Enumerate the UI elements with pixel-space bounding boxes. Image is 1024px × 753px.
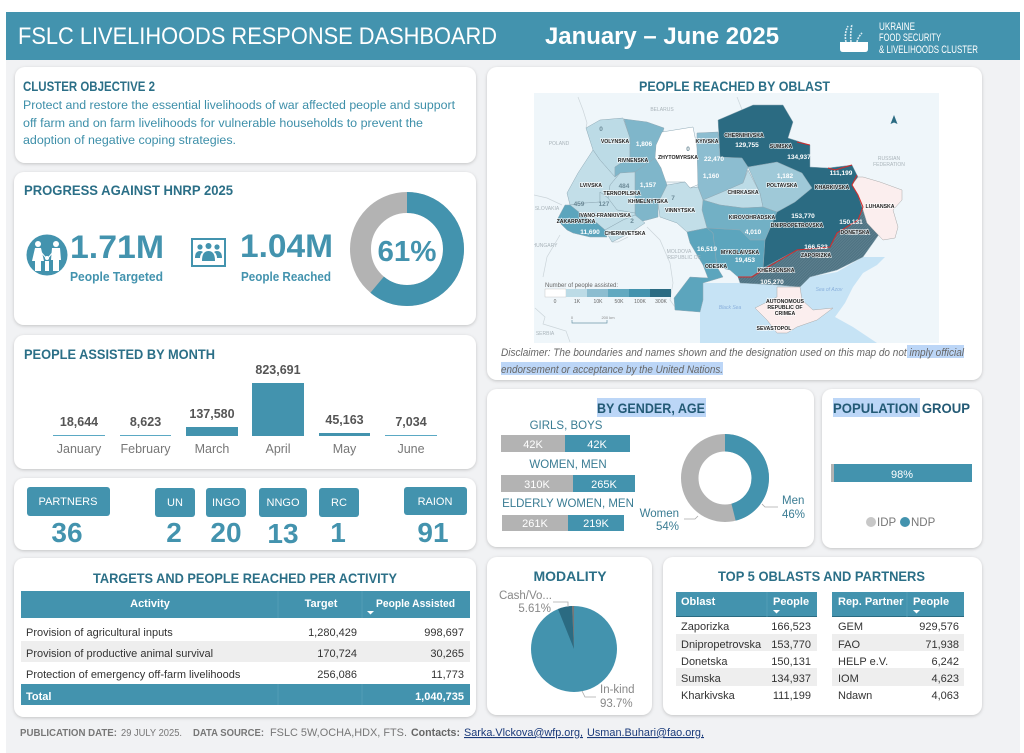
oblast labels: CHIRKASKA [727,190,759,196]
donut chart: women, men: Women [640,508,679,520]
bar chart: monthly: April [265,442,291,456]
stacked bars: age groups: 42K [523,439,543,451]
panel: top 5 oblasts and partners [663,557,982,715]
country labels: REPUBLIC OF [667,255,701,261]
stat: people reached: 1.04M [240,228,333,264]
table: oblasts: 153,770 [771,639,811,651]
pie chart: 93.7% [600,698,633,710]
bar chart: monthly [53,363,437,456]
panel: cluster objective [15,67,476,163]
heading: targets: TARGETS AND PEOPLE REACHED PER ACTIVITY [93,570,398,586]
table: partners: Ndawn [838,690,872,702]
map legend: 10K [594,299,603,305]
bar chart: monthly: 823,691 [255,363,301,377]
bar chart: monthly: January [57,442,102,456]
table: partners: FAO [838,639,860,651]
table: partners: GEM [838,621,863,633]
map legend: 0 [554,299,557,305]
partner labels: PARTNERS [39,496,97,508]
footer: Sarka.Vlckova@wfp.org, [464,727,583,739]
partner labels: UN [167,497,183,509]
oblast values [574,126,863,286]
oblast labels: CHERNIHIVSKA [724,133,764,139]
icon: family [26,234,68,276]
bar chart: monthly: May [333,442,357,456]
oblast values: 22,470 [704,156,724,163]
neighbour borders [534,97,743,342]
disclaimer: Disclaimer: The boundaries and names shown and the designation used on this map do not imply official [501,347,964,359]
panel: partners [14,478,476,550]
oblast labels: KYIVSKA [695,139,719,145]
table: partners: People [913,596,949,608]
table: activities: 1,040,735 [415,691,464,703]
country labels: SERBIA [536,331,555,337]
bar chart: monthly: March [195,442,229,456]
stat: people reached: People Reached [241,270,331,284]
table: activities: People Assisted [376,598,455,610]
header banner [6,12,1020,60]
stacked bars: age groups: ELDERLY WOMEN, MEN [502,498,634,510]
partner counts: 1 [330,517,346,548]
oblast values: 11,690 [580,229,600,236]
table: partners: HELP e.V. [838,656,888,668]
scale bar: 200 km [601,315,615,320]
stat: people targeted [70,229,164,284]
country labels: Black Sea [719,305,741,311]
table: oblasts: Zaporizka [681,621,730,633]
oblast values: 1,182 [777,173,794,180]
panel: people reached by oblast [487,67,982,380]
pie chart [499,590,635,710]
partner labels [39,496,452,509]
oblast labels: ZHYTOMYRSKA [658,155,698,161]
table: oblasts: Oblast [681,596,716,608]
table: activities: Protection of emergency off-farm livelihoods [26,669,241,681]
oblast labels: LUHANSKA [865,204,895,210]
table: oblasts: 150,131 [771,656,811,668]
table: oblasts: Dnipropetrovska [681,639,762,651]
partner counts: 20 [210,517,242,548]
table: oblasts: Kharkivska [681,690,736,702]
oblast labels: DNIPROPETROVSKA [771,223,823,229]
oblast values: 7 [671,195,675,202]
donut chart: women, men: Men [782,495,804,507]
stacked bars: age groups: 310K [524,479,551,491]
logo text: & LIVELIHOODS CLUSTER [879,44,978,56]
heading: map: PEOPLE REACHED BY OBLAST [639,78,830,94]
panel: targets per activity [14,558,476,717]
objective text: adoption of negative coping strategies. [23,133,236,147]
oblast labels: POLTAVSKA [767,183,798,189]
bar chart: monthly: 45,163 [325,413,364,427]
table: activities: Target [305,598,338,610]
logo text [879,21,978,56]
pie chart: 5.61% [518,603,551,615]
heading: cluster objective: CLUSTER OBJECTIVE 2 [23,78,155,94]
table: activities: 11,773 [431,669,464,681]
oblast values: 111,199 [830,170,853,177]
table: oblasts: 111,199 [773,690,811,702]
stacked bars: age groups: WOMEN, MEN [529,459,607,471]
oblast labels: REPUBLIC OF [767,305,803,311]
oblast values: 459 [574,201,585,208]
oblast labels: SEVASTOPOL [757,326,792,332]
oblast labels: KHERSONSKA [758,268,795,274]
map legend [545,283,671,305]
heading: progress: PROGRESS AGAINST HNRP 2025 [24,182,233,198]
oblast labels: CHERNIVETSKA [605,231,646,237]
panel: modality [487,557,652,715]
table: partners: 6,242 [931,656,959,668]
partner labels: RAION [418,496,452,508]
partner counts [51,517,449,549]
title: FSLC LIVELIHOODS RESPONSE DASHBOARD [18,23,497,50]
bar chart: monthly: 8,623 [130,415,161,429]
table: partners: 4,623 [931,673,959,685]
oblast labels: MYKOLAIVSKA [721,250,759,256]
panel: people assisted by month [14,335,476,469]
donut chart: women, men: 46% [782,509,805,521]
oblast values: 127 [599,201,610,208]
panel: population group [822,389,982,548]
stacked bars: age groups: 219K [583,518,610,530]
country labels: Sea of Azov [816,287,843,293]
table: partners [832,592,964,702]
pie chart: In-kind [600,684,635,696]
table: partners: Rep. Partner [838,596,904,608]
oblast labels: LVIVSKA [580,183,602,189]
oblast values: 484 [619,183,630,190]
oblast values: 134,937 [787,154,811,161]
oblast values: 0 [686,146,690,153]
footer [20,727,704,739]
panel: progress against HNRP [14,172,476,325]
partner labels: INGO [212,497,240,509]
logo: wheat bowl [840,24,868,52]
heading: gender: BY GENDER, AGE [597,400,705,416]
bar chart: monthly: 137,580 [189,407,235,421]
oblast labels: KHMELNYTSKA [628,199,668,205]
oblast labels: DONETSKA [840,230,870,236]
stacked bars: age groups: 261K [522,518,549,530]
logo text: FOOD SECURITY [879,32,941,44]
logo text: UKRAINE [879,21,915,33]
bar chart: monthly: June [397,442,425,456]
partner counts: 2 [166,517,182,548]
table: activities: Activity [130,598,171,610]
table: oblasts: 166,523 [771,621,811,633]
stat: people targeted: People Targeted [70,270,163,284]
oblast labels: CRIMEA [775,311,795,317]
stat: people targeted: 1.71M [70,229,164,265]
table: activities: 30,265 [430,648,464,660]
footer: DATA SOURCE: [193,728,264,739]
partner counts: 91 [417,517,449,548]
footer: Usman.Buhari@fao.org, [587,727,704,739]
table: activities: 1,280,429 [308,627,357,639]
oblast labels: KIROVOHRADSKA [729,215,775,221]
oblast labels: ZAKARPATSKA [557,219,596,225]
donut chart: 61% [360,202,454,296]
oblast labels: RIVNENSKA [618,158,649,164]
country labels: FEDERATION [873,162,905,168]
oblast labels [557,133,895,332]
table: partners: 71,938 [925,639,959,651]
stat: people reached [240,228,333,284]
oblast values: 0 [599,126,603,133]
bar chart: monthly: 7,034 [395,415,427,429]
oblast values: 105,270 [760,279,784,286]
heading: population: POPULATION GROUP [833,400,970,416]
icon: group of people [192,239,225,266]
table: oblasts: 134,937 [771,673,811,685]
oblast values: 166,523 [804,244,828,251]
oblast labels: VINNYTSKA [665,208,695,214]
country labels: BELARUS [650,107,674,113]
legend: IDP [877,517,896,529]
oblast values: 150,131 [839,219,863,226]
legend [866,517,936,529]
oblast labels: VOLYNSKA [601,139,629,145]
pie chart: Cash/Vo... [499,590,552,602]
oblast values: 19,453 [735,257,755,264]
table: partners: 929,576 [919,621,959,633]
objective text: Protect and restore the essential livelihoods of war affected people and support [23,98,456,112]
objective text: off farm and on farm livelihoods for vulnerable households to prevent the [23,116,423,130]
map legend: 300K [655,299,667,305]
partner counts: 36 [51,517,83,548]
footer: PUBLICATION DATE: [20,728,117,739]
country labels: RUSSIAN [878,156,900,162]
partner buttons [27,487,467,517]
country labels [533,107,905,337]
map legend: 1K [574,299,581,305]
bar: 98% NDP [831,464,972,482]
oblast values: 2 [630,218,634,225]
table: activities: 256,086 [317,669,357,681]
oblast labels: TERNOPILSKA [603,191,641,197]
map legend: Number of people assisted: [545,283,618,289]
table: partners: IOM [838,673,859,685]
table: oblasts [676,592,817,702]
table: activities [21,591,470,705]
partner labels: NNGO [266,497,300,509]
country labels: SLOVAKIA [535,206,560,212]
disclaimer: endorsement or acceptance by the United Nations. [501,364,723,376]
stacked bars: age groups [501,420,635,531]
table: activities: Provision of agricultural inputs [26,627,173,639]
oblast labels: SUMSKA [770,144,792,150]
heading: top 5: TOP 5 OBLASTS AND PARTNERS [718,568,925,584]
oblast values: 1,160 [703,173,720,180]
country labels: HUNGARY [533,243,558,249]
objective text [23,98,456,147]
oblast labels: AUTONOMOUS [766,299,805,305]
heading: by month: PEOPLE ASSISTED BY MONTH [24,346,215,362]
donut chart: women, men [640,443,805,533]
partner labels: RC [331,497,347,509]
bar chart: monthly: February [120,442,171,456]
oblast values: 129,755 [735,142,759,149]
table: partners: 4,063 [931,690,959,702]
oblasts [557,105,902,333]
donut chart: women, men: 54% [656,521,679,533]
table: activities: Provision of productive animal survival [26,648,213,660]
disclaimer [501,345,964,376]
oblast values: 1,806 [636,141,653,148]
oblast labels: KHARKIVSKA [815,185,850,191]
oblast values: 153,770 [791,213,815,220]
heading: modality: MODALITY [533,568,607,584]
partner counts: 13 [267,518,299,549]
date range: January – June 2025 [545,23,779,50]
stacked bars: age groups: GIRLS, BOYS [530,420,603,432]
stacked bars: age groups: 42K [587,439,607,451]
oblast labels: IVANO-FRANKIVSKA [579,213,631,219]
table: activities: 998,697 [424,627,464,639]
frontline [738,142,863,277]
country labels: MOLDOVA [667,249,692,255]
country labels: POLAND [549,141,570,147]
scale bar [571,316,614,324]
stacked bars: age groups: 265K [591,479,618,491]
table: activities: 170,724 [317,648,357,660]
icon: north arrow [890,115,898,124]
oblast values: 4,010 [745,229,762,236]
scale bar: 0 [571,315,574,320]
footer: FSLC 5W,OCHA,HDX, FTS. [270,727,407,739]
oblast values: 1,157 [640,182,657,189]
table: oblasts: People [773,596,809,608]
legend: NDP [911,517,936,529]
map legend: 100K [634,299,646,305]
donut chart: 61%: 61% [378,236,437,268]
map legend: 50K [615,299,624,305]
oblast values: 16,519 [697,246,717,253]
footer: Contacts: [411,727,460,739]
table: oblasts: Sumska [681,673,722,685]
table: oblasts: Donetska [681,656,728,668]
panel: by gender, age [487,389,814,547]
map of Ukraine [533,93,939,343]
footer: 29 JULY 2025. [121,728,182,739]
bar: 98% NDP: 98% [891,469,913,481]
oblast labels: ODESKA [705,264,727,270]
oblast labels: ZAPORIZKA [801,253,831,259]
table: activities: Total [26,691,51,703]
sea [700,257,885,343]
bar chart: monthly: 18,644 [60,415,98,429]
